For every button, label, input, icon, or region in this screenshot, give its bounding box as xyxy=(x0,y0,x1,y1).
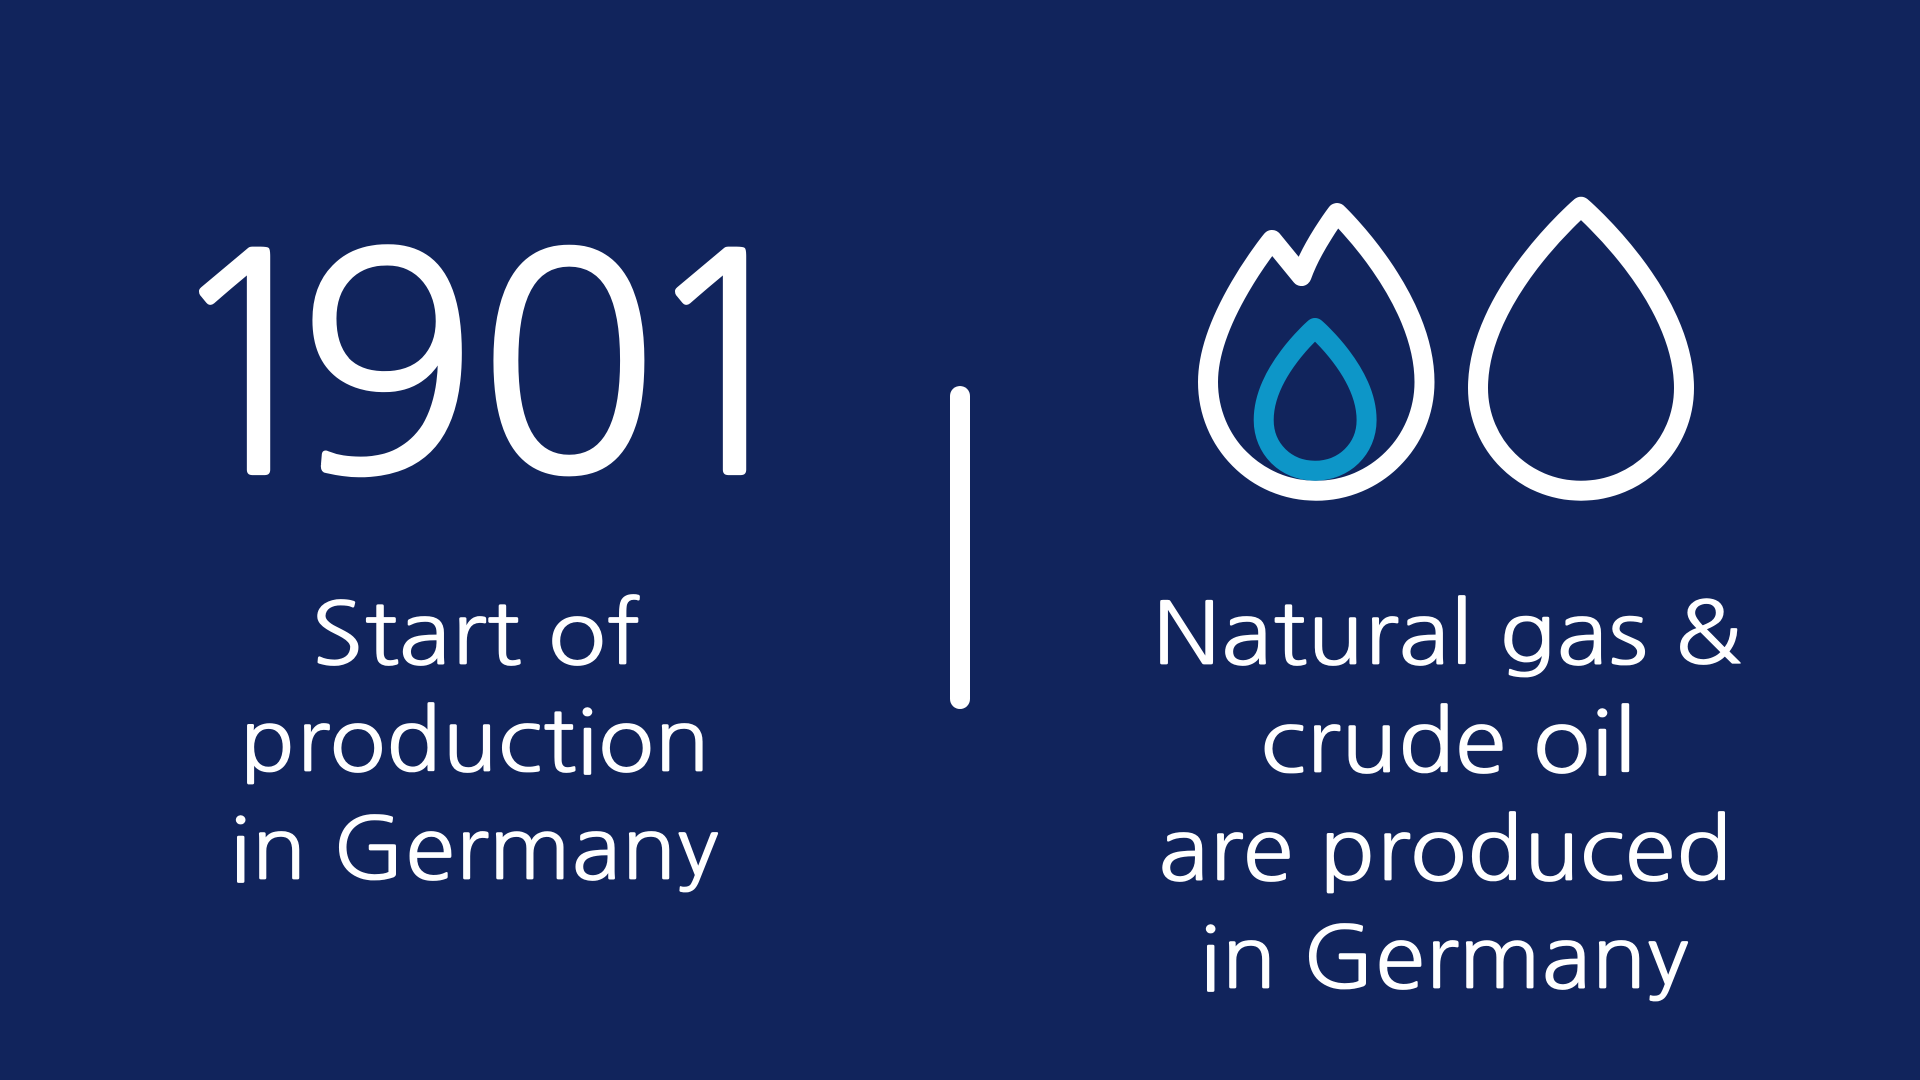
big number: 1901: 1 xyxy=(633,214,817,517)
text: natural gas and crude oil are produced in Germany: crude oil xyxy=(1260,699,1636,785)
icon: gas flame with inner drop xyxy=(1208,213,1424,491)
text: start of production in Germany: production xyxy=(240,698,710,784)
icon: oil drop xyxy=(1478,207,1684,491)
big number: 1901: 9 xyxy=(295,214,479,517)
text: natural gas and crude oil are produced in Germany: in Germany xyxy=(1199,915,1689,1001)
panel: natural gas and crude oil xyxy=(1152,207,1743,1001)
text: natural gas and crude oil are produced in Germany: Natural gas & xyxy=(1152,591,1743,677)
text: natural gas and crude oil are produced in Germany: are produced xyxy=(1158,807,1732,893)
divider xyxy=(950,386,970,709)
text: start of production in Germany xyxy=(229,591,719,892)
text: start of production in Germany: Start of xyxy=(311,591,641,677)
big number: 1901: 1 xyxy=(157,214,341,517)
big number: 1901 xyxy=(157,214,817,517)
panel: start of production xyxy=(157,214,817,892)
text: start of production in Germany: in Germany xyxy=(229,806,719,892)
big number: 1901: 0 xyxy=(476,214,660,517)
text: natural gas and crude oil are produced in Germany xyxy=(1152,591,1743,1001)
